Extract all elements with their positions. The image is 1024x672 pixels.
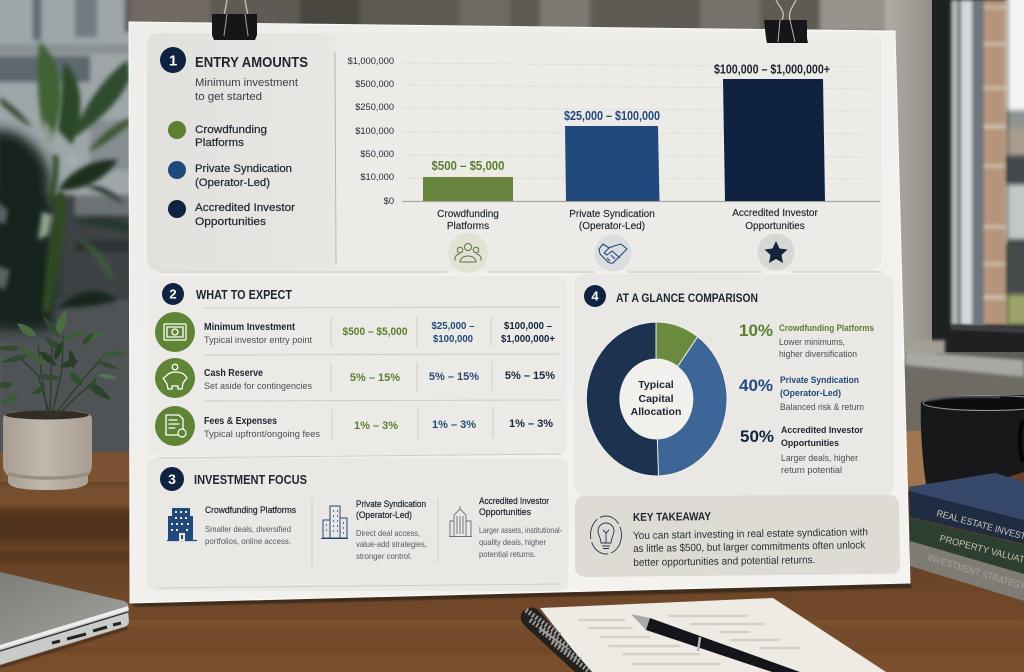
bar chart: Opportunities bbox=[745, 221, 805, 232]
stat: 40 percent: Private Syndication bbox=[780, 375, 859, 386]
panel: investment focus bbox=[158, 467, 562, 588]
icon: star bbox=[758, 234, 794, 270]
stat: 50 percent bbox=[740, 425, 863, 476]
background: top curtain bbox=[125, 0, 915, 32]
panel: entry amounts bbox=[160, 47, 880, 273]
binder clip left bbox=[212, 0, 257, 40]
panel backgrounds bbox=[147, 33, 894, 591]
row: minimum investment: $100,000 bbox=[433, 333, 473, 345]
heading: what to expect bbox=[162, 283, 292, 305]
column: accredited investor: quality deals, higher bbox=[479, 537, 546, 547]
bar chart: $50,000 bbox=[360, 149, 394, 159]
background: stack of books bbox=[909, 473, 1024, 601]
stat: 50 percent: Accredited Investor bbox=[781, 425, 863, 436]
stat: 40 percent: (Operator-Led) bbox=[780, 388, 841, 399]
column: accredited investor: Accredited Investor bbox=[479, 496, 549, 506]
heading: investment focus: 3 bbox=[168, 471, 176, 487]
stat: 50 percent: Opportunities bbox=[781, 438, 839, 449]
legend bbox=[168, 121, 295, 228]
heading: investment focus bbox=[160, 467, 307, 491]
heading: at a glance: AT A GLANCE COMPARISON bbox=[616, 291, 758, 305]
background: left window bbox=[0, 0, 135, 310]
column: accredited investor: Larger assets, institutional- bbox=[479, 525, 562, 535]
row: minimum investment: $25,000 – bbox=[432, 320, 475, 332]
icon: document with fee bbox=[155, 406, 195, 446]
donut chart bbox=[586, 322, 727, 476]
legend: Private Syndication bbox=[195, 163, 292, 175]
bar chart: Accredited Investor bbox=[732, 208, 818, 219]
bar chart: (Operator-Led) bbox=[579, 221, 645, 232]
stat: 10 percent bbox=[739, 321, 874, 360]
column: private syndication: value-add strategies, bbox=[356, 539, 427, 549]
subtitle bbox=[195, 77, 298, 103]
background: sofa bbox=[0, 300, 135, 456]
row: cash reserve: Set aside for contingencies bbox=[204, 381, 312, 392]
row: cash reserve bbox=[155, 358, 555, 398]
bar chart: Private Syndication bbox=[569, 209, 655, 220]
panel: key takeaway bbox=[575, 495, 900, 577]
background: small potted plant bbox=[0, 308, 128, 490]
heading: entry amounts bbox=[160, 47, 308, 73]
stat: 50 percent: return potential bbox=[781, 465, 842, 476]
panel: key takeaway: You can start investing in real estate syndication with bbox=[633, 526, 868, 542]
row: minimum investment: $1,000,000+ bbox=[501, 333, 555, 345]
subtitle: to get started bbox=[195, 91, 262, 103]
row: cash reserve: 5% – 15% bbox=[350, 372, 400, 384]
column: accredited investor: Opportunities bbox=[479, 507, 531, 517]
subtitle: Minimum investment bbox=[195, 77, 298, 89]
column: crowdfunding platforms: Crowdfunding Platforms bbox=[205, 505, 296, 515]
heading: at a glance: 4 bbox=[591, 288, 599, 304]
row: cash reserve: Cash Reserve bbox=[204, 368, 263, 379]
background: notebook and pen bbox=[521, 598, 886, 672]
background: coffee mug bbox=[921, 395, 1024, 484]
row: minimum investment bbox=[155, 312, 555, 352]
bar chart: $0 bbox=[384, 196, 394, 206]
background: table bbox=[0, 425, 1024, 672]
stat: 40 percent: Balanced risk & return bbox=[780, 402, 864, 413]
bar chart: $500,000 bbox=[355, 79, 394, 89]
stat: 10 percent: higher diversification bbox=[779, 349, 857, 360]
legend: Crowdfunding bbox=[195, 124, 267, 136]
stat: 40 percent bbox=[739, 375, 864, 413]
legend: Opportunities bbox=[195, 216, 267, 228]
legend: Platforms bbox=[195, 137, 245, 149]
heading: at a glance bbox=[584, 285, 758, 307]
icon: office building solid bbox=[167, 508, 197, 540]
stat: 50 percent: 50% bbox=[740, 427, 774, 446]
bar chart: $10,000 bbox=[360, 172, 394, 182]
legend: Accredited Investor bbox=[195, 202, 295, 214]
row: minimum investment: $500 – $5,000 bbox=[342, 326, 408, 338]
bar chart: $1,000,000 bbox=[347, 56, 394, 66]
column: private syndication: stronger control. bbox=[356, 551, 412, 561]
icon: handshake bbox=[594, 234, 632, 272]
donut center label: Typical bbox=[638, 379, 674, 391]
bar chart bbox=[347, 56, 880, 232]
stat: 10 percent: Crowdfunding Platforms bbox=[779, 323, 874, 334]
row: fees and expenses: 1% – 3% bbox=[432, 419, 476, 431]
panel: key takeaway: better opportunities and potential returns. bbox=[633, 554, 815, 569]
bar chart: $100,000 – $1,000,000+ bbox=[714, 62, 830, 76]
bar chart: Platforms bbox=[447, 221, 489, 232]
donut center label bbox=[631, 379, 681, 418]
heading: entry amounts: ENTRY AMOUNTS bbox=[195, 54, 308, 71]
column: private syndication: Direct deal access, bbox=[356, 528, 420, 538]
column: private syndication bbox=[321, 499, 427, 561]
column: crowdfunding platforms bbox=[167, 505, 296, 546]
column: private syndication: (Operator-Led) bbox=[356, 510, 412, 520]
stat: 40 percent: 40% bbox=[739, 376, 773, 395]
panel: at a glance comparison bbox=[584, 285, 874, 476]
column: accredited investor bbox=[449, 496, 562, 559]
background: large blurred plant bbox=[0, 42, 130, 330]
row: minimum investment: Typical investor entry point bbox=[204, 335, 312, 346]
stat: 10 percent: Lower minimums, bbox=[779, 337, 845, 348]
row: fees and expenses: 1% – 3% bbox=[509, 418, 553, 430]
column: accredited investor: potential returns. bbox=[479, 549, 536, 559]
bar chart: $500 – $5,000 bbox=[432, 159, 505, 173]
column: crowdfunding platforms: portfolios, online access. bbox=[205, 536, 291, 546]
icon: piggy bank bbox=[155, 358, 195, 398]
panel: key takeaway: as little as $500, but larger commitments often unlock bbox=[633, 539, 866, 555]
donut center label: Allocation bbox=[631, 406, 681, 418]
paper sheet bbox=[129, 22, 910, 603]
binder clip right bbox=[764, 0, 808, 43]
stat: 10 percent: 10% bbox=[739, 321, 773, 340]
column: private syndication: Private Syndication bbox=[356, 499, 426, 509]
heading: what to expect: 2 bbox=[169, 286, 177, 302]
heading: what to expect: WHAT TO EXPECT bbox=[196, 288, 292, 302]
panel: key takeaway: KEY TAKEAWAY bbox=[633, 511, 711, 524]
stat: 50 percent: Larger deals, higher bbox=[781, 453, 858, 464]
row: fees and expenses: 1% – 3% bbox=[354, 420, 398, 432]
icon: money bbox=[155, 312, 195, 352]
donut center label: Capital bbox=[638, 393, 674, 405]
bar chart: Crowdfunding bbox=[437, 209, 499, 220]
row: cash reserve: 5% – 15% bbox=[429, 371, 479, 383]
legend: (Operator-Led) bbox=[195, 177, 270, 189]
icon: high-rise outline bbox=[449, 506, 472, 536]
bar chart: $250,000 bbox=[355, 102, 394, 112]
icon: people bbox=[448, 233, 488, 273]
panel: what to expect bbox=[155, 283, 561, 458]
column: crowdfunding platforms: Smaller deals, diversified bbox=[205, 524, 291, 534]
heading: investment focus: INVESTMENT FOCUS bbox=[194, 472, 307, 487]
background: shadow under paper bbox=[130, 583, 912, 607]
row: fees and expenses: Fees & Expenses bbox=[204, 416, 277, 427]
row: fees and expenses bbox=[155, 406, 553, 446]
row: minimum investment: $100,000 – bbox=[504, 320, 552, 332]
background: laptop bbox=[0, 572, 129, 667]
icon: apartment tower bbox=[321, 506, 348, 538]
row: minimum investment: Minimum Investment bbox=[204, 322, 296, 333]
bar chart: $100,000 bbox=[355, 126, 394, 136]
bar chart: $25,000 – $100,000 bbox=[564, 109, 660, 123]
heading: entry amounts: 1 bbox=[169, 52, 177, 70]
row: fees and expenses: Typical upfront/ongoing fees bbox=[204, 429, 320, 440]
row: cash reserve: 5% – 15% bbox=[505, 370, 555, 382]
icon: light bulb bbox=[590, 516, 622, 554]
background: wall and window right bbox=[885, 0, 1024, 436]
